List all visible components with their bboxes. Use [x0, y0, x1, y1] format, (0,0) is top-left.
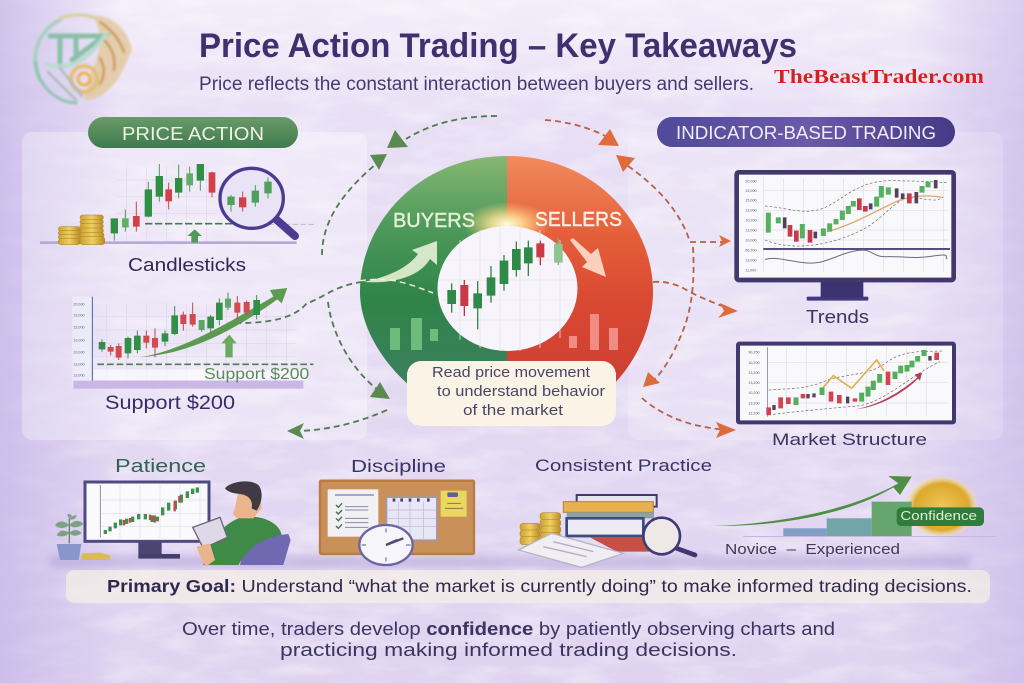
section: patience	[55, 481, 291, 566]
chart: support level: 15,000	[73, 326, 85, 330]
dashed midline across ring	[360, 279, 433, 293]
pill: indicator-based heading: INDICATOR-BASED TRADING	[676, 123, 936, 143]
callout: read price movement: Read price movement	[432, 364, 591, 381]
ring: buyers half	[360, 156, 507, 386]
monitor: trends: 20,000	[745, 179, 757, 183]
closing text: practicing making informed trading decisions.	[280, 640, 737, 660]
label: market structure: Market Structure	[772, 430, 927, 449]
monitor: trends: 10,200	[745, 218, 757, 222]
central buyers and sellers ring	[360, 156, 653, 386]
icon: coins	[520, 513, 561, 545]
label: trends: Trends	[806, 307, 869, 327]
icon: books	[563, 495, 657, 552]
arrow: rising trend	[140, 288, 287, 357]
chart: support level: 10,000	[73, 338, 85, 342]
section: consistent practice	[518, 476, 997, 567]
label: patience: Patience	[115, 456, 206, 476]
section: discipline	[320, 481, 474, 565]
monitor: market structure: 13,200	[748, 371, 760, 375]
pill: confidence: Confidence	[900, 508, 977, 523]
monitor: trends: 10,000	[745, 238, 757, 242]
chart: center candlesticks	[438, 226, 578, 351]
pill: indicator-based heading	[657, 117, 955, 147]
chart: support level: 13,000	[73, 313, 85, 317]
title: Price Action Trading – Key Takeaways	[199, 27, 797, 65]
panel: indicator-based trading	[628, 117, 1003, 440]
callout: read price movement: of the market	[463, 402, 564, 419]
monitor: market structure: 10,200	[748, 361, 760, 365]
monitor: trends: 13,000	[745, 209, 757, 213]
label: candlesticks: Candlesticks	[128, 255, 246, 275]
watermark: TheBeastTrader.com: TheBeastTrader.com	[774, 66, 984, 88]
arrows: red dashed flows	[545, 120, 738, 438]
monitor: market structure: 12,200	[748, 412, 760, 416]
pill: price action heading: PRICE ACTION	[122, 124, 264, 144]
bars: sellers volume	[569, 314, 618, 350]
icon: magnifier	[643, 518, 695, 555]
chart: support level	[72, 288, 313, 389]
subtitle: Price reflects the constant interaction between buyers and sellers.	[199, 74, 754, 95]
monitor: trends: 13,000	[745, 228, 757, 232]
ring: sellers half	[507, 156, 653, 386]
primary goal band: Primary Goal: Understand “what the market is currently doing” to make informed trading decisions.	[107, 576, 972, 596]
monitor: market structure	[738, 344, 954, 422]
chart: candlesticks with magnifier	[40, 164, 315, 245]
label: support $200: Support $200	[105, 393, 235, 414]
label: sellers: SELLERS	[535, 209, 622, 231]
bars: buyers volume	[390, 318, 438, 350]
icon: plant	[55, 514, 83, 560]
arrow: buyers up	[364, 241, 437, 282]
chart: support level: 20,000	[73, 303, 85, 307]
label: buyers: BUYERS	[393, 210, 475, 232]
ground strip	[50, 556, 970, 568]
icon: coin stacks	[58, 215, 105, 245]
chart: support level: 10,000	[73, 351, 85, 355]
pill: confidence	[897, 507, 984, 526]
chart: support level: 13,000	[73, 374, 85, 378]
monitor: market structure: 10,200	[748, 391, 760, 395]
label: consistent practice: Consistent Practice	[535, 456, 712, 475]
monitor: market structure: 13,200	[748, 401, 760, 405]
monitor: trends: 65,200	[745, 249, 757, 253]
arrows: green dashed flows	[240, 116, 497, 439]
monitor: market structure: 90,250	[748, 351, 760, 355]
monitor: market structure: 13,200	[748, 381, 760, 385]
panel: price action	[22, 117, 367, 440]
pill: price action heading	[88, 117, 298, 148]
label: support on chart: Support $200	[204, 366, 310, 383]
closing text	[182, 619, 835, 660]
callout: read price movement: to understand behavior	[437, 383, 605, 400]
monitor: trends: 11,000	[745, 269, 756, 273]
closing text: Over time, traders develop confidence by patiently observing charts and	[182, 619, 835, 639]
label: discipline: Discipline	[351, 456, 446, 476]
monitor: trends: 15,000	[745, 199, 757, 203]
icon: magnifier	[220, 168, 295, 236]
icon: person at desk	[193, 481, 291, 566]
monitor: trends: 13,000	[745, 189, 757, 193]
chart: novice to experienced steps	[713, 476, 997, 537]
monitor: trends: 13,000	[745, 259, 757, 263]
callout: read price movement	[407, 361, 616, 426]
monitor: trends	[737, 172, 954, 301]
logo: lion emblem	[35, 15, 132, 103]
label: novice to experienced: Novice – Experienced	[725, 541, 900, 558]
primary goal band	[66, 570, 990, 603]
chart: support level: 13,000	[73, 363, 85, 367]
arrow: sellers down	[570, 238, 606, 277]
